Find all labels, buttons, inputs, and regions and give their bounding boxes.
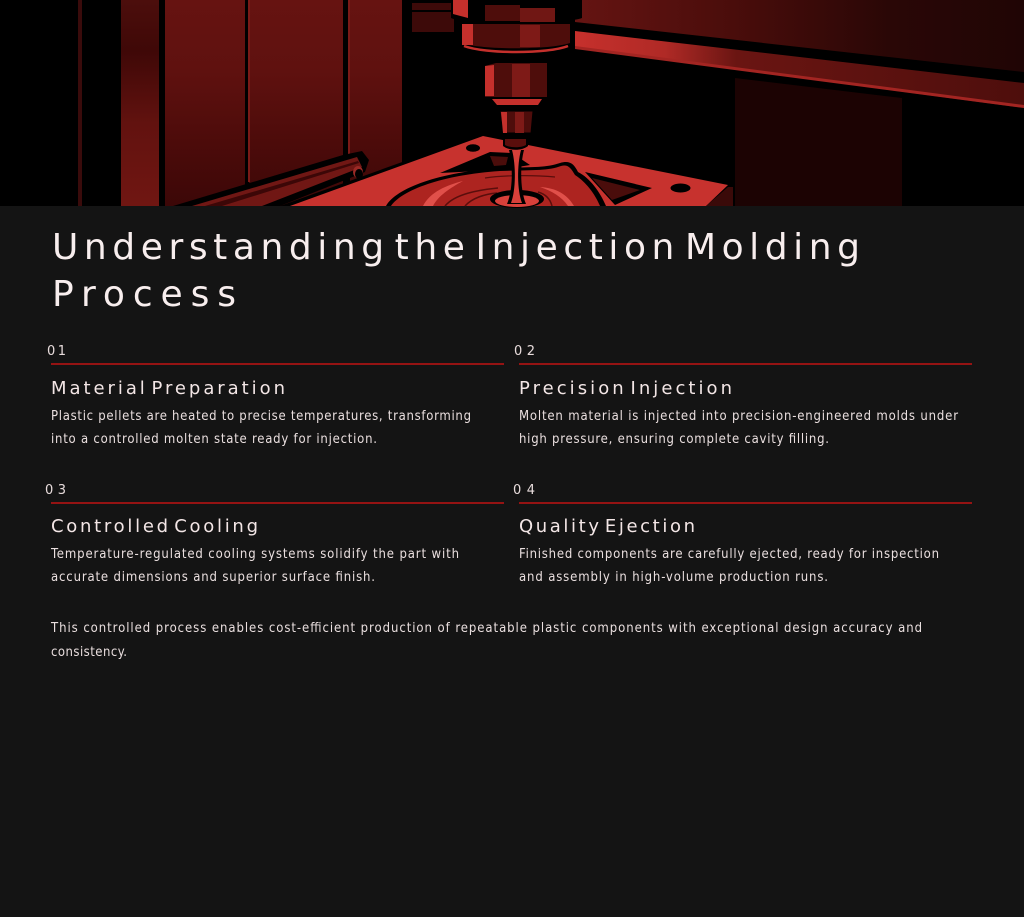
step 03 description: accurate dimensions and superior surface finish. — [51, 570, 375, 585]
nozzle housing — [451, 0, 582, 22]
upper right panel and beam — [412, 0, 1024, 206]
injection nozzle — [451, 0, 582, 204]
mold plate — [280, 133, 735, 206]
step 03: controlled cooling — [45, 483, 504, 585]
step 03 rule — [51, 502, 504, 504]
step 04 heading: Quality Ejection — [519, 516, 695, 537]
step number 04: 04 — [513, 483, 535, 498]
title: Understanding the Injection Molding — [52, 227, 860, 268]
nozzle hex section — [485, 63, 547, 97]
closing summary: consistency. — [51, 645, 127, 660]
step 04: quality ejection — [513, 483, 972, 585]
step 02: precision injection — [514, 344, 972, 447]
closing summary — [50, 621, 922, 660]
step 01 heading: Material Preparation — [51, 378, 285, 399]
step number 01: 01 — [47, 344, 66, 359]
nozzle tip — [503, 137, 528, 150]
step 04 description: Finished components are carefully ejected, ready for inspection — [519, 547, 939, 562]
nozzle flange — [492, 99, 542, 105]
step 03 heading: Controlled Cooling — [51, 516, 258, 537]
nozzle collar — [460, 22, 572, 54]
step 02 description: high pressure, ensuring complete cavity filling. — [519, 432, 829, 447]
step 01 description: into a controlled molten state ready for injection. — [51, 432, 377, 447]
closing summary: This controlled process enables cost-efficient production of repeatable plastic components with exceptional design accuracy and — [50, 621, 922, 636]
step 01 description: Plastic pellets are heated to precise temperatures, transforming — [51, 409, 471, 424]
step 01: material preparation — [47, 344, 504, 447]
step 04 rule — [519, 502, 972, 504]
step 03 description: Temperature-regulated cooling systems solidify the part with — [50, 547, 459, 562]
step 02 rule — [519, 363, 972, 365]
step 04 description: and assembly in high-volume production runs. — [519, 570, 828, 585]
title — [52, 227, 860, 315]
step 02 description — [519, 409, 958, 447]
nozzle barrel — [500, 111, 533, 133]
step number 02: 02 — [514, 344, 535, 359]
step 02 description: Molten material is injected into precision-engineered molds under — [519, 409, 958, 424]
step 02 heading: Precision Injection — [519, 378, 732, 399]
machine frame panels — [78, 0, 402, 206]
molten stream — [507, 150, 526, 204]
molten plastic pool — [386, 162, 606, 208]
step number 03: 03 — [45, 483, 66, 498]
guide rail — [173, 151, 369, 206]
step 04 description — [519, 547, 939, 585]
step 01 description — [51, 409, 471, 447]
title: Process — [52, 274, 236, 315]
step 01 rule — [51, 363, 504, 365]
hero illustration: injection molding machine — [0, 0, 1024, 208]
step 03 description — [50, 547, 459, 585]
